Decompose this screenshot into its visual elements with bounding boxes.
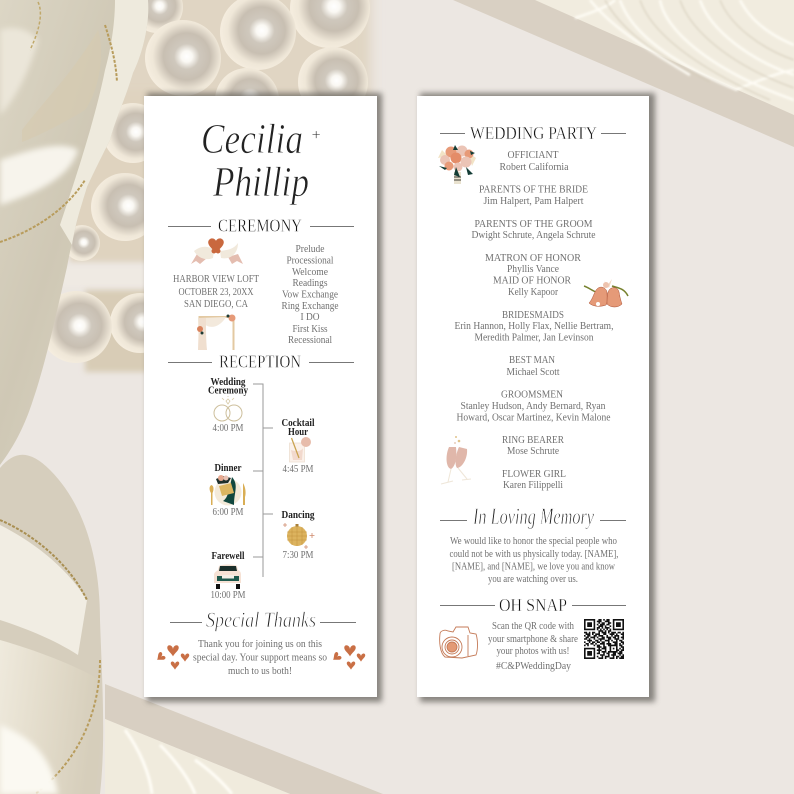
timeline item: cocktail hour — [282, 418, 315, 475]
ceremony order list: Welcome — [292, 267, 329, 278]
satin ribbon bottom left — [0, 455, 103, 794]
timeline item: cocktail hour: Hour — [288, 427, 308, 438]
timeline item: dinner — [210, 463, 246, 518]
timeline item: dinner: Dinner — [214, 463, 242, 474]
timeline item: cocktail hour: 4:45 PM — [282, 464, 314, 475]
party list: Jim Halpert, Pam Halpert — [484, 196, 584, 207]
timeline item: wedding ceremony: 4:00 PM — [212, 423, 244, 434]
timeline item: wedding ceremony: Wedding — [210, 377, 246, 388]
party list: Kelly Kapoor — [508, 287, 559, 298]
icon: camera — [440, 627, 478, 658]
party list — [454, 150, 614, 491]
title: couple names: Phillip — [212, 160, 309, 206]
party list: Meredith Palmer, Jan Levinson — [474, 332, 594, 344]
heading: ceremony: CEREMONY — [218, 216, 302, 236]
card shadows — [147, 93, 655, 702]
party list: GROOMSMEN — [501, 390, 563, 400]
timeline item: wedding ceremony: Ceremony — [208, 386, 248, 396]
envelope flap bottom left — [105, 684, 383, 794]
memorial message: We would like to honor the special people who — [450, 536, 617, 547]
party list: Robert California — [500, 162, 569, 173]
timeline item: dancing: Dancing — [282, 510, 314, 521]
thank you message: much to us both! — [228, 666, 292, 677]
ceremony order list: Vow Exchange — [282, 290, 339, 300]
icon: champagne flutes — [441, 436, 471, 484]
title: couple names: + — [311, 127, 321, 144]
heading: wedding party: WEDDING PARTY — [470, 123, 597, 143]
party list: Stanley Hudson, Andy Bernard, Ryan — [460, 401, 606, 412]
heading: special thanks: Special Thanks — [206, 607, 316, 632]
ceremony order list: I DO — [300, 312, 320, 323]
ceremony order list — [282, 244, 339, 346]
icon: bouquet — [438, 145, 476, 184]
party list: RING BEARER — [502, 435, 564, 446]
icon: hearts left — [154, 645, 189, 670]
venue details: OCTOBER 23, 20XX — [178, 287, 254, 298]
party list: BRIDESMAIDS — [502, 310, 564, 321]
ceremony order list: Ring Exchange — [282, 301, 339, 312]
timeline item: dancing: 7:30 PM — [282, 550, 314, 561]
card background — [144, 96, 377, 697]
timeline item: dancing — [282, 510, 314, 561]
ceremony order list: Readings — [292, 278, 328, 289]
scan instructions: Scan the QR code with — [492, 621, 574, 632]
memorial message: you are watching over us. — [488, 574, 578, 585]
icon: floral arch — [197, 314, 236, 350]
timeline item: wedding ceremony — [208, 377, 248, 434]
timeline item: cocktail hour: Cocktail — [282, 418, 315, 429]
memorial message — [450, 536, 618, 585]
party list: FLOWER GIRL — [502, 469, 566, 480]
party list: Dwight Schrute, Angela Schrute — [472, 230, 596, 241]
ceremony order list: Prelude — [296, 244, 325, 255]
party list: OFFICIANT — [508, 150, 558, 161]
scan instructions — [488, 621, 578, 672]
memorial message: could not be with us physically today. [NAME], — [450, 549, 618, 560]
party list: PARENTS OF THE BRIDE — [479, 184, 588, 196]
icon: hearts right — [330, 645, 365, 670]
timeline item: dinner: 6:00 PM — [212, 507, 244, 518]
scan instructions: #C&PWeddingDay — [496, 661, 571, 672]
party list: MAID OF HONOR — [493, 276, 571, 286]
venue details — [173, 274, 259, 310]
envelope flap top right — [453, 0, 794, 147]
party list: PARENTS OF THE GROOM — [474, 219, 593, 230]
party list: Erin Hannon, Holly Flax, Nellie Bertram, — [454, 321, 614, 332]
heading: reception: RECEPTION — [219, 352, 301, 372]
title: couple names — [201, 117, 321, 206]
pearls behind the cards — [40, 0, 371, 372]
ceremony order list: Recessional — [288, 335, 332, 346]
timeline item: farewell: 10:00 PM — [210, 590, 246, 601]
venue details: HARBOR VIEW LOFT — [173, 274, 259, 285]
scan instructions: your photos with us! — [496, 646, 570, 657]
party list: Mose Schrute — [507, 446, 560, 457]
party list: Karen Filippelli — [503, 480, 563, 491]
thank you message: special day. Your support means so — [193, 652, 327, 664]
memorial message: [NAME], and [NAME], we love you and know — [452, 562, 616, 572]
scan instructions: your smartphone & share — [488, 634, 578, 645]
timeline item: farewell — [210, 551, 246, 601]
panel: right card, wedding party — [417, 96, 649, 697]
thank you message: Thank you for joining us on this — [198, 639, 322, 650]
panel: left card, ceremony and reception — [144, 96, 377, 697]
ceremony order list: Processional — [286, 256, 334, 266]
thank you message — [193, 639, 327, 677]
party list: Michael Scott — [506, 367, 560, 378]
heading: in loving memory: In Loving Memory — [472, 504, 595, 529]
QR code — [584, 620, 624, 658]
icon: bells — [584, 279, 628, 307]
venue details: SAN DIEGO, CA — [184, 299, 249, 310]
icon: doves with heart — [191, 238, 243, 264]
satin ribbon top left — [0, 0, 148, 465]
card background — [417, 96, 649, 697]
timeline axis — [253, 384, 273, 577]
heading: oh snap: OH SNAP — [499, 595, 567, 615]
ceremony order list: First Kiss — [292, 324, 328, 335]
timeline item: farewell: Farewell — [212, 551, 245, 562]
party list: Howard, Oscar Martinez, Kevin Malone — [456, 412, 611, 424]
title: couple names: Cecilia — [201, 117, 303, 163]
party list: BEST MAN — [509, 355, 555, 366]
party list: MATRON OF HONOR — [485, 253, 581, 264]
party list: Phyllis Vance — [507, 264, 560, 275]
